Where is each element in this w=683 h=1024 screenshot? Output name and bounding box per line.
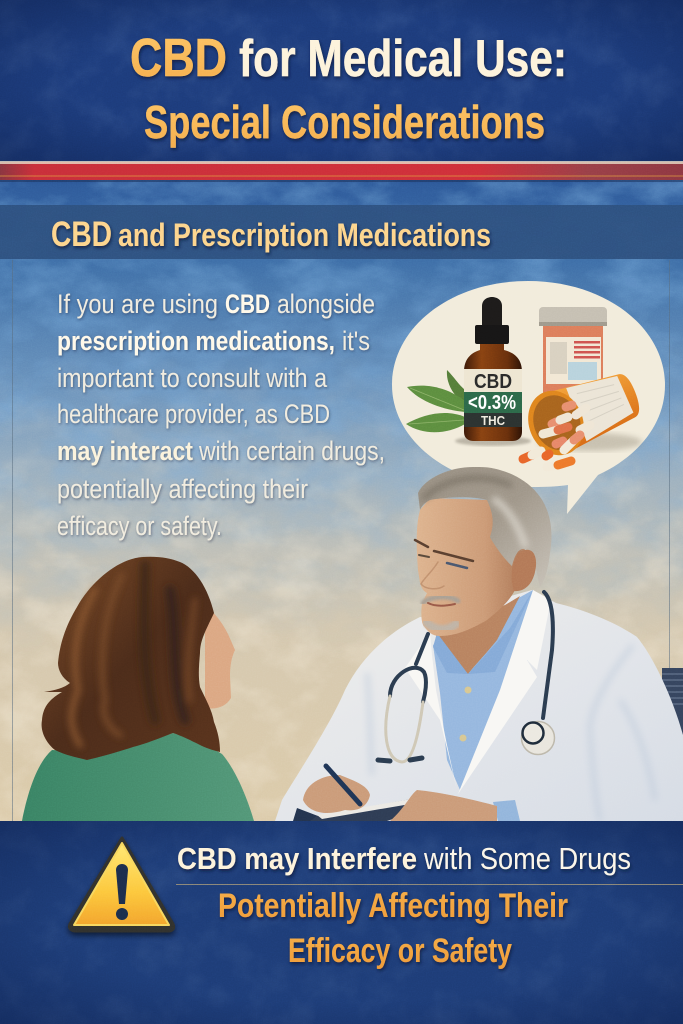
section heading xyxy=(51,215,491,254)
bottom callout panel xyxy=(0,821,683,1024)
speech bubble xyxy=(392,281,665,514)
textured background xyxy=(0,180,683,821)
body paragraph: potentially affecting their xyxy=(57,474,308,504)
body paragraph: it's xyxy=(342,326,370,356)
body paragraph: If you are using xyxy=(57,289,218,319)
title line 1 xyxy=(130,28,567,88)
doctor hands xyxy=(303,775,497,821)
doctor shirt cuff xyxy=(493,800,520,821)
callout line 1: CBD may Interfere xyxy=(177,841,417,876)
body paragraph: prescription medications, xyxy=(57,326,335,356)
doctor hair strands xyxy=(424,478,525,545)
doctor hair xyxy=(418,467,551,587)
woman hair highlights xyxy=(72,565,195,745)
woman hair xyxy=(42,557,220,760)
red divider stripe xyxy=(0,161,683,182)
bottle label text: THC xyxy=(481,413,506,428)
woman face xyxy=(205,605,235,709)
doctor lapels xyxy=(405,590,551,794)
body paragraph: with certain drugs, xyxy=(198,436,385,466)
woman sweater xyxy=(22,733,254,821)
bottle label text: <0.3% xyxy=(468,392,516,414)
body paragraph: CBD xyxy=(225,289,270,319)
section heading: and Prescription Medications xyxy=(118,217,491,253)
body paragraph: healthcare provider, as CBD xyxy=(57,399,330,429)
clipboard xyxy=(310,800,408,821)
bottle label text xyxy=(468,371,516,428)
doctor head xyxy=(417,498,530,636)
body paragraph: may interact xyxy=(57,436,193,466)
doctor ear xyxy=(512,550,536,591)
body paragraph: alongside xyxy=(277,289,375,319)
body paragraph: efficacy or safety. xyxy=(57,511,222,541)
body paragraph: important to consult with a xyxy=(57,363,328,393)
icon: spilled pill bottle xyxy=(519,362,647,467)
header panel xyxy=(0,0,683,162)
pen xyxy=(326,766,360,804)
title line 1: CBD xyxy=(130,28,227,88)
callout line 3: Efficacy or Safety xyxy=(288,932,512,970)
stethoscope xyxy=(378,592,554,762)
coat folds xyxy=(367,645,655,821)
doctor collar xyxy=(433,590,533,674)
section heading band xyxy=(0,205,683,259)
callout line 2: Potentially Affecting Their xyxy=(218,887,568,925)
callout line 1 xyxy=(177,841,631,876)
doctor shirt xyxy=(433,590,533,790)
icon: CBD dropper bottle xyxy=(455,297,531,446)
doctor coat xyxy=(275,590,683,821)
title line 1: for Medical Use: xyxy=(239,30,567,88)
title line 2: Special Considerations xyxy=(144,96,545,148)
icon: prescription jar xyxy=(539,307,607,394)
doctor shirt buttons xyxy=(460,686,472,742)
icon: cannabis leaves xyxy=(406,370,466,432)
chair back xyxy=(662,668,683,735)
doctor xyxy=(275,467,683,821)
woman seen from behind xyxy=(22,557,254,821)
bottle label text: CBD xyxy=(474,371,512,393)
section heading: CBD xyxy=(51,215,112,254)
callout line 1: with Some Drugs xyxy=(423,841,631,876)
pills xyxy=(523,405,590,467)
doctor facial features xyxy=(415,540,473,629)
doctor neck xyxy=(435,596,520,674)
icon: warning triangle xyxy=(69,838,174,931)
doctor left cuff xyxy=(293,808,318,821)
body paragraph xyxy=(57,289,385,541)
